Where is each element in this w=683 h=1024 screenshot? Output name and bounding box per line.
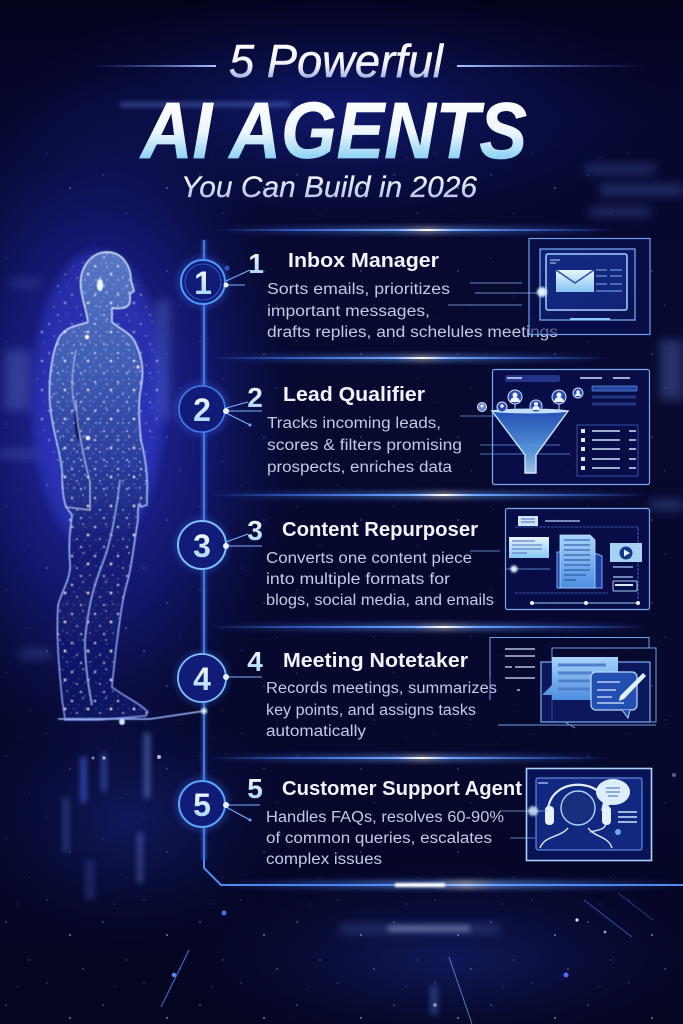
item 5: customer support agent bbox=[174, 768, 652, 868]
icon: lead funnel panel bbox=[460, 370, 650, 484]
item 1: inbox manager bbox=[176, 238, 650, 341]
description 3: blogs, social media, and emails bbox=[266, 592, 494, 609]
description 3: Converts one content piece bbox=[266, 550, 472, 567]
description 1: Sorts emails, prioritizes bbox=[267, 281, 450, 298]
floor line bbox=[58, 711, 204, 719]
description 2: prospects, enriches data bbox=[267, 459, 452, 476]
badge 1: 1 bbox=[194, 265, 212, 301]
description 5: of common queries, escalates bbox=[266, 830, 492, 847]
heading 3: Content Repurposer bbox=[282, 519, 478, 541]
description 4 bbox=[266, 680, 497, 740]
number 5: 5 bbox=[247, 773, 263, 804]
badge 2: 2 bbox=[193, 392, 211, 428]
icon: support agent panel bbox=[500, 768, 652, 860]
badge 1 bbox=[176, 255, 250, 309]
title rule left bbox=[90, 65, 216, 67]
description 2: Tracks incoming leads, bbox=[267, 415, 441, 432]
heading 5: Customer Support Agent bbox=[282, 778, 522, 800]
description 2: scores & filters promising bbox=[267, 437, 462, 454]
badge 3: 3 bbox=[193, 528, 211, 564]
title line 2: AI AGENTS bbox=[139, 86, 527, 175]
badge 3 bbox=[174, 517, 262, 573]
item 4: meeting notetaker bbox=[174, 638, 656, 740]
number 3: 3 bbox=[247, 515, 263, 546]
number 2: 2 bbox=[247, 382, 263, 413]
description 4: key points, and assigns tasks bbox=[266, 702, 476, 719]
heading 2: Lead Qualifier bbox=[283, 384, 425, 406]
title glow streak bbox=[120, 102, 290, 107]
number 4: 4 bbox=[247, 646, 263, 677]
title rule right bbox=[457, 65, 647, 67]
badge 5 bbox=[174, 776, 260, 832]
icon: meeting notes panel bbox=[490, 638, 656, 728]
title bbox=[90, 35, 647, 204]
badge 2 bbox=[174, 381, 262, 437]
description 1: important messages, bbox=[267, 303, 430, 320]
human figure bbox=[30, 250, 204, 730]
badge 4 bbox=[174, 650, 262, 706]
description 3: into multiple formats for bbox=[266, 571, 450, 588]
description 5: complex issues bbox=[266, 851, 382, 868]
timeline rail bbox=[201, 240, 683, 889]
description 5: Handles FAQs, resolves 60-90% bbox=[266, 809, 504, 826]
badge 5: 5 bbox=[193, 787, 211, 823]
number 1: 1 bbox=[248, 248, 264, 279]
description 1 bbox=[267, 281, 558, 341]
item 2: lead qualifier bbox=[174, 370, 650, 484]
description 3 bbox=[266, 550, 494, 609]
title line 3: You Can Build in 2026 bbox=[181, 171, 477, 204]
description 4: automatically bbox=[266, 723, 366, 740]
item 3: content repurposer bbox=[174, 508, 650, 610]
dividers bbox=[210, 226, 650, 762]
heading 1: Inbox Manager bbox=[288, 250, 439, 272]
icon: content formats panel bbox=[470, 508, 650, 610]
badge 4: 4 bbox=[193, 661, 211, 697]
icon: inbox email panel bbox=[448, 238, 650, 334]
description 2 bbox=[267, 415, 462, 476]
title line 1: 5 Powerful bbox=[229, 35, 445, 87]
description 1: drafts replies, and schelules meetings bbox=[267, 324, 558, 341]
heading 4: Meeting Notetaker bbox=[283, 650, 468, 672]
description 4: Records meetings, summarizes bbox=[266, 680, 497, 697]
description 5 bbox=[266, 809, 504, 868]
